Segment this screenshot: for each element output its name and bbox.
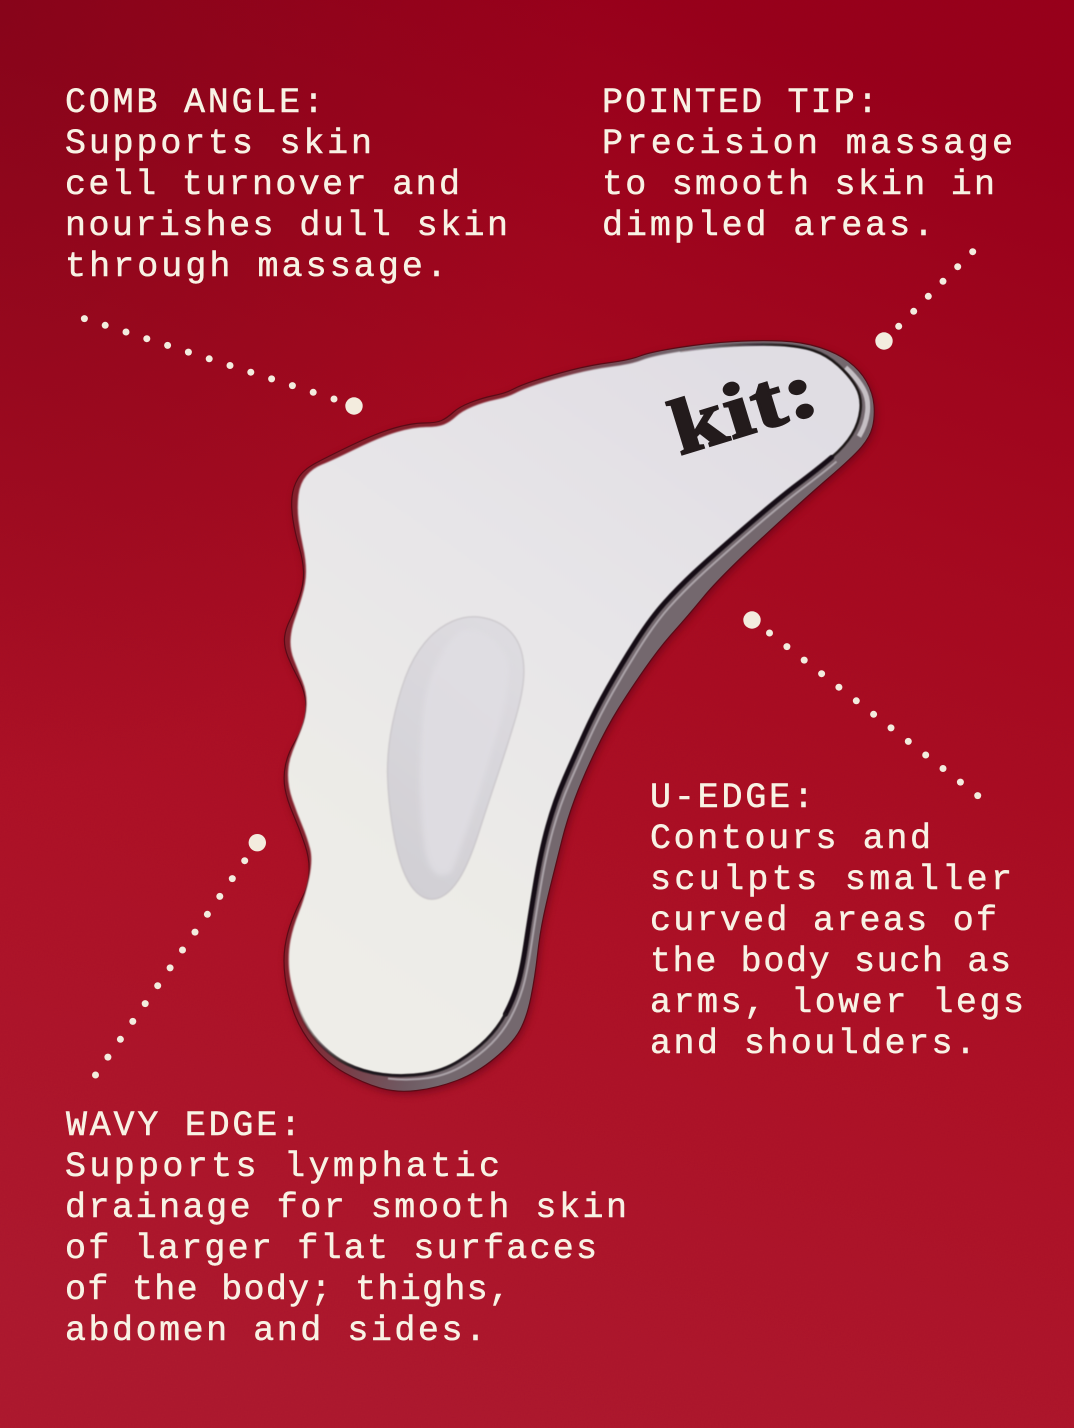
text block: u-edge: sculpts smaller	[650, 860, 1012, 900]
rim silver highlight	[388, 462, 836, 1080]
dark edge reflection line	[506, 458, 832, 1014]
text block: u-edge: U-EDGE:	[650, 778, 814, 818]
text block: pointed tip: POINTED TIP:	[602, 83, 878, 123]
tip silver highlight	[846, 368, 868, 436]
text block: wavy edge: WAVY EDGE:	[66, 1106, 301, 1146]
dark bottom reflection line	[290, 975, 506, 1076]
text block: comb angle: COMB ANGLE:	[65, 83, 324, 123]
kit: logo: kit:	[660, 344, 828, 471]
text block: pointed tip	[602, 83, 1013, 246]
tool shadow	[286, 344, 876, 1094]
dark tip reflection line	[680, 345, 861, 458]
text block: pointed tip: dimpled areas.	[602, 206, 934, 246]
text block: wavy edge: drainage for smooth skin	[65, 1188, 627, 1228]
text block: wavy edge	[65, 1106, 627, 1351]
text block: wavy edge: abdomen and sides.	[65, 1311, 486, 1351]
text block: u-edge	[650, 778, 1024, 1064]
text block: comb angle	[65, 83, 508, 287]
text block: u-edge: and shoulders.	[650, 1024, 976, 1064]
text block: comb angle: Supports skin	[65, 124, 372, 164]
dotted leader: comb angle	[81, 315, 363, 415]
text block: comb angle: nourishes dull skin	[65, 206, 508, 246]
text block: wavy edge: of the body; thighs,	[65, 1270, 510, 1310]
dotted leader: u-edge	[743, 611, 981, 799]
cream swatch	[387, 617, 524, 899]
text block: u-edge: the body such as	[650, 942, 1011, 982]
tool mirror face	[288, 345, 861, 1076]
text block: wavy edge: of larger flat surfaces	[65, 1229, 597, 1269]
text block: comb angle: through massage.	[65, 247, 447, 287]
text block: u-edge: curved areas of	[650, 901, 997, 941]
tool rim	[284, 341, 874, 1091]
text block: u-edge: arms, lower legs	[650, 983, 1024, 1023]
text block: wavy edge: Supports lymphatic	[65, 1147, 500, 1187]
dotted leader: pointed tip	[875, 248, 976, 350]
text block: comb angle: cell turnover and	[65, 165, 460, 205]
gua sha steel tool	[284, 341, 876, 1094]
text block: pointed tip: to smooth skin in	[602, 165, 995, 205]
dotted leader: wavy edge	[92, 834, 266, 1078]
text block: pointed tip: Precision massage	[602, 124, 1013, 164]
text block: u-edge: Contours and	[650, 819, 931, 859]
